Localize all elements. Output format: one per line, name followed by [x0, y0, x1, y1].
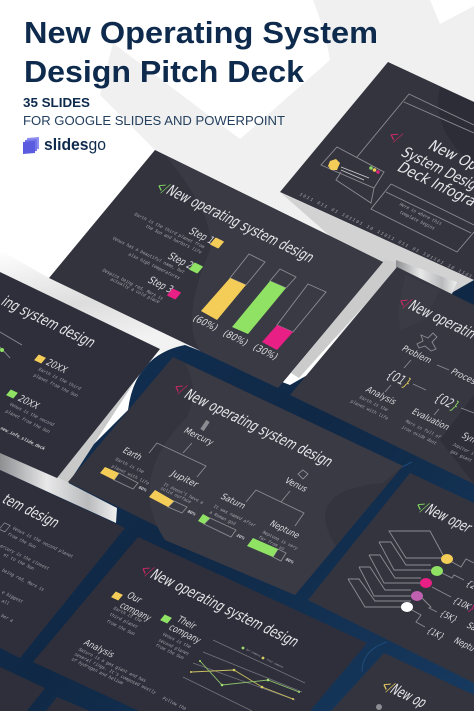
panel: left list slide	[0, 470, 125, 658]
process flow: Evaluation	[409, 407, 452, 433]
venus branch: It was named after	[212, 504, 257, 529]
layered funnel diagram	[348, 531, 474, 654]
title: New Operating System	[24, 15, 378, 50]
layered funnel diagram: {1K}	[424, 626, 447, 642]
company legend: Venus is the	[161, 632, 193, 650]
slide title: ing system design	[0, 293, 100, 351]
step list: Step 3	[145, 275, 176, 296]
blue highlight arcs	[362, 462, 412, 672]
panel: layers slide	[308, 473, 474, 683]
process flow: Analysis	[363, 385, 399, 407]
company legend: from the Sun	[105, 619, 137, 637]
background ghost shape	[100, 0, 474, 345]
slide title: New operating system design	[162, 182, 318, 266]
mercury branch: It doesn't have a	[162, 482, 205, 506]
timeline items	[0, 332, 82, 452]
logo: slidesgo	[23, 135, 106, 154]
list items: all	[0, 598, 11, 607]
venus branch: Neptune	[267, 519, 302, 541]
title: Design Pitch Deck	[24, 54, 305, 89]
step list: Step 1	[186, 226, 217, 247]
panel: bottom right slide: </	[377, 677, 397, 695]
mercury branch: Mercury	[181, 426, 216, 448]
subtitle: 35 SLIDES	[23, 95, 90, 110]
company legend: Our	[124, 590, 144, 606]
slide title	[152, 178, 318, 266]
company legend	[105, 590, 204, 661]
binary footer: 1011 011 01 101101 10 11011 011 01 101101 10 1101	[298, 192, 474, 280]
process flow: Problem	[399, 344, 434, 366]
line chart	[183, 640, 305, 711]
company legend: from the Sun	[154, 643, 186, 661]
timeline items: 20XX	[15, 393, 42, 412]
analysis text: of hydrogen and helium	[70, 657, 125, 686]
panel: bottom left slides	[0, 667, 90, 711]
mercury branch: planet with life	[110, 464, 151, 487]
panel: steps bar chart slide	[49, 150, 383, 388]
step list: Earth is the third planet from	[133, 212, 206, 250]
panel: line chart slide	[33, 537, 367, 711]
timeline items: new_info_slide_deck	[0, 426, 47, 452]
mercury branch: Earth	[120, 446, 144, 463]
list items: et to the Sun	[2, 552, 36, 572]
timeline items: Venus is the second	[8, 402, 56, 428]
venus branch: Venus	[282, 476, 310, 495]
silver strip under top slide	[396, 260, 457, 294]
slide title: New operating system design	[146, 566, 303, 650]
venus branch: Saturn	[218, 492, 248, 512]
layered funnel diagram: {5K}	[437, 609, 460, 625]
list items: Venus is the second planet	[11, 526, 75, 560]
mercury branch: 80%	[186, 509, 198, 517]
venus branch: 80%	[284, 557, 296, 565]
silver strip below left slide	[0, 445, 117, 523]
wordmark: slidesgo	[44, 135, 106, 154]
title	[24, 15, 378, 89]
venus branch: far from us	[257, 535, 286, 552]
mercury branch: Earth is the	[114, 457, 146, 475]
analysis text	[70, 638, 188, 711]
company legend: company	[117, 600, 154, 624]
company legend: company	[166, 622, 204, 646]
timeline items: planet from the Sun	[32, 373, 80, 399]
mercury branch: solid surface	[159, 486, 193, 505]
slide title: tem design	[0, 491, 63, 531]
step list	[101, 212, 224, 305]
process flow: Mars is full of	[404, 419, 443, 440]
panel: bottom right slide	[331, 653, 474, 711]
icon: puzzle cross	[417, 333, 437, 351]
step list: the Sun and harbors life	[144, 224, 203, 255]
analysis text: Analysis	[81, 638, 117, 660]
process flow: iron oxide dust	[400, 425, 439, 446]
step list: actually a cold place	[109, 277, 161, 305]
slide title: </	[169, 379, 189, 397]
venus branch: a Roman god	[208, 510, 237, 527]
slide title	[136, 561, 303, 650]
process flow: planet with life	[349, 399, 390, 422]
process flow: {01}	[382, 368, 415, 391]
slide title	[169, 379, 337, 470]
bar chart: (30%)	[250, 342, 280, 363]
slide title: </	[384, 127, 405, 146]
navy backdrop	[0, 280, 474, 711]
list items: being red, Mars is	[0, 568, 46, 593]
icon: slidesgo stack	[23, 137, 39, 154]
analysis text: Saturn is a gas giant and has	[77, 647, 148, 684]
timeline items: Earth is the third	[37, 367, 82, 392]
slide title	[411, 497, 474, 536]
panel: top slide	[280, 62, 474, 280]
slide title: </	[411, 497, 431, 515]
company legend: third planet	[108, 612, 140, 630]
bar chart: (60%)	[190, 313, 220, 334]
slide title: </	[136, 561, 156, 579]
step list: Venus has a beautiful name, but	[111, 236, 186, 275]
slide title: </	[394, 293, 414, 311]
venus branch	[198, 470, 310, 565]
caption: template begins	[398, 210, 437, 231]
panel: process slide	[290, 267, 474, 484]
step list: also high temperatures	[127, 252, 182, 281]
silver strip right of steps slide	[291, 260, 398, 378]
timeline items: planet from the Sun	[4, 409, 52, 435]
caption: Here is where this	[398, 202, 443, 227]
process flow: gas giant	[449, 449, 474, 464]
list items	[0, 523, 75, 624]
silver strip under steps slide	[0, 250, 190, 352]
list items: e biggest	[0, 590, 25, 605]
list items: from the Sun	[6, 532, 38, 550]
venus branch: Neptune is very	[261, 530, 300, 551]
window illustration	[321, 94, 474, 252]
process flow: {02}	[430, 391, 463, 414]
slide title: New operating system design	[180, 386, 337, 470]
step list: Despite being red, Mars is	[101, 268, 165, 302]
panel: tree slide	[68, 357, 403, 595]
shadow below top slide	[281, 193, 474, 310]
slide title	[384, 127, 474, 210]
bar chart	[190, 254, 326, 363]
line chart: Their company	[265, 658, 285, 669]
company legend: second planet	[157, 638, 191, 657]
mercury branch: 60%	[137, 485, 149, 493]
venus branch: 20%	[235, 533, 247, 541]
company legend: Earth is the	[112, 606, 144, 624]
analysis text: several rings. It's composed mostly	[73, 652, 158, 696]
timeline items: 20XX	[43, 357, 70, 376]
mercury branch	[100, 421, 216, 517]
subtitle	[23, 95, 285, 128]
silver strip left of tree slide	[55, 349, 161, 484]
slide title: </	[152, 178, 172, 196]
company legend: Their	[173, 614, 199, 632]
mercury branch: Jupiter	[167, 469, 201, 490]
panel: left timeline slide	[0, 272, 160, 478]
bar chart: (80%)	[220, 328, 250, 349]
process flow: Earth is the	[358, 395, 390, 413]
subtitle: FOR GOOGLE SLIDES AND POWERPOINT	[23, 113, 285, 128]
step list: Step 2	[165, 251, 196, 272]
line chart: Our company	[245, 648, 262, 658]
process flow	[349, 344, 474, 464]
